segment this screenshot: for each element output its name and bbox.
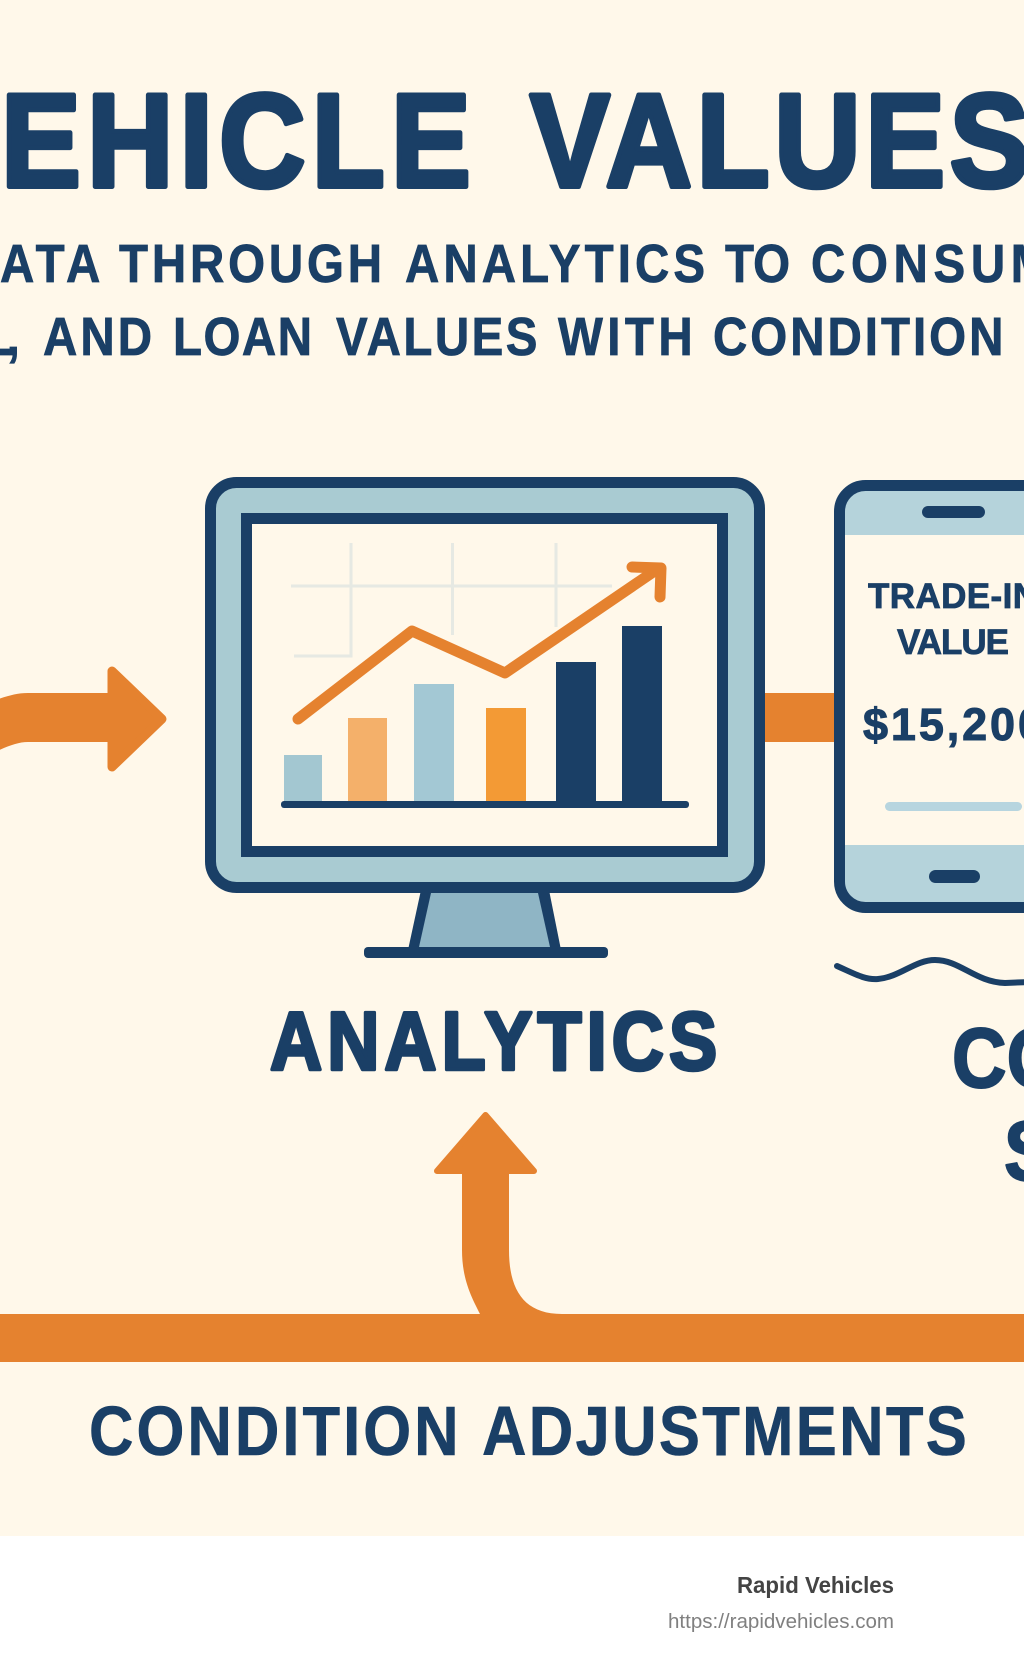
wavy underline — [837, 960, 1024, 983]
trade-in value heading — [868, 577, 1024, 662]
footer url: https://rapidvehicles.com — [668, 1611, 894, 1633]
icon: phone showing value — [840, 486, 1024, 908]
chart grid — [291, 543, 612, 656]
label: condition adjustments — [89, 1391, 967, 1470]
title: EHICLE — [1, 66, 471, 215]
subtitle: ATA — [0, 233, 100, 294]
arrow: condition adjustments feed — [0, 1115, 1024, 1362]
label: clipped consumer heading — [952, 1011, 1024, 1198]
title: VALUES — [530, 66, 1024, 215]
bar chart — [281, 626, 689, 808]
monitor screen — [246, 518, 722, 852]
label: analytics: ANALYTICS — [270, 996, 717, 1088]
subtitle: AND — [43, 306, 152, 367]
subtitle: WITH — [558, 306, 693, 367]
phone button — [929, 870, 980, 883]
phone rule — [885, 802, 1022, 811]
label: condition adjustments: CONDITION — [89, 1391, 459, 1470]
monitor frame — [210, 482, 760, 888]
phone body — [840, 486, 1024, 908]
phone speaker — [922, 506, 985, 518]
connector: monitor to phone — [765, 693, 834, 742]
subtitle: VALUES — [336, 306, 538, 367]
subtitle — [0, 233, 1024, 367]
subtitle: ANALYTICS — [405, 233, 705, 294]
subtitle: CONDITION — [713, 306, 1003, 367]
subtitle: LOAN — [173, 306, 312, 367]
arrow: data into analytics — [0, 671, 162, 767]
title — [1, 66, 1024, 215]
phone display — [845, 535, 1024, 845]
trade-in value heading: VALUE — [897, 623, 1009, 662]
subtitle: THROUGH — [119, 233, 382, 294]
monitor stand — [364, 890, 608, 958]
label: condition adjustments: ADJUSTMENTS — [482, 1391, 967, 1470]
subtitle: TO — [725, 233, 790, 294]
icon: analytics monitor — [210, 482, 760, 958]
trend line arrow — [298, 567, 661, 719]
footer brand: Rapid Vehicles — [737, 1572, 894, 1598]
